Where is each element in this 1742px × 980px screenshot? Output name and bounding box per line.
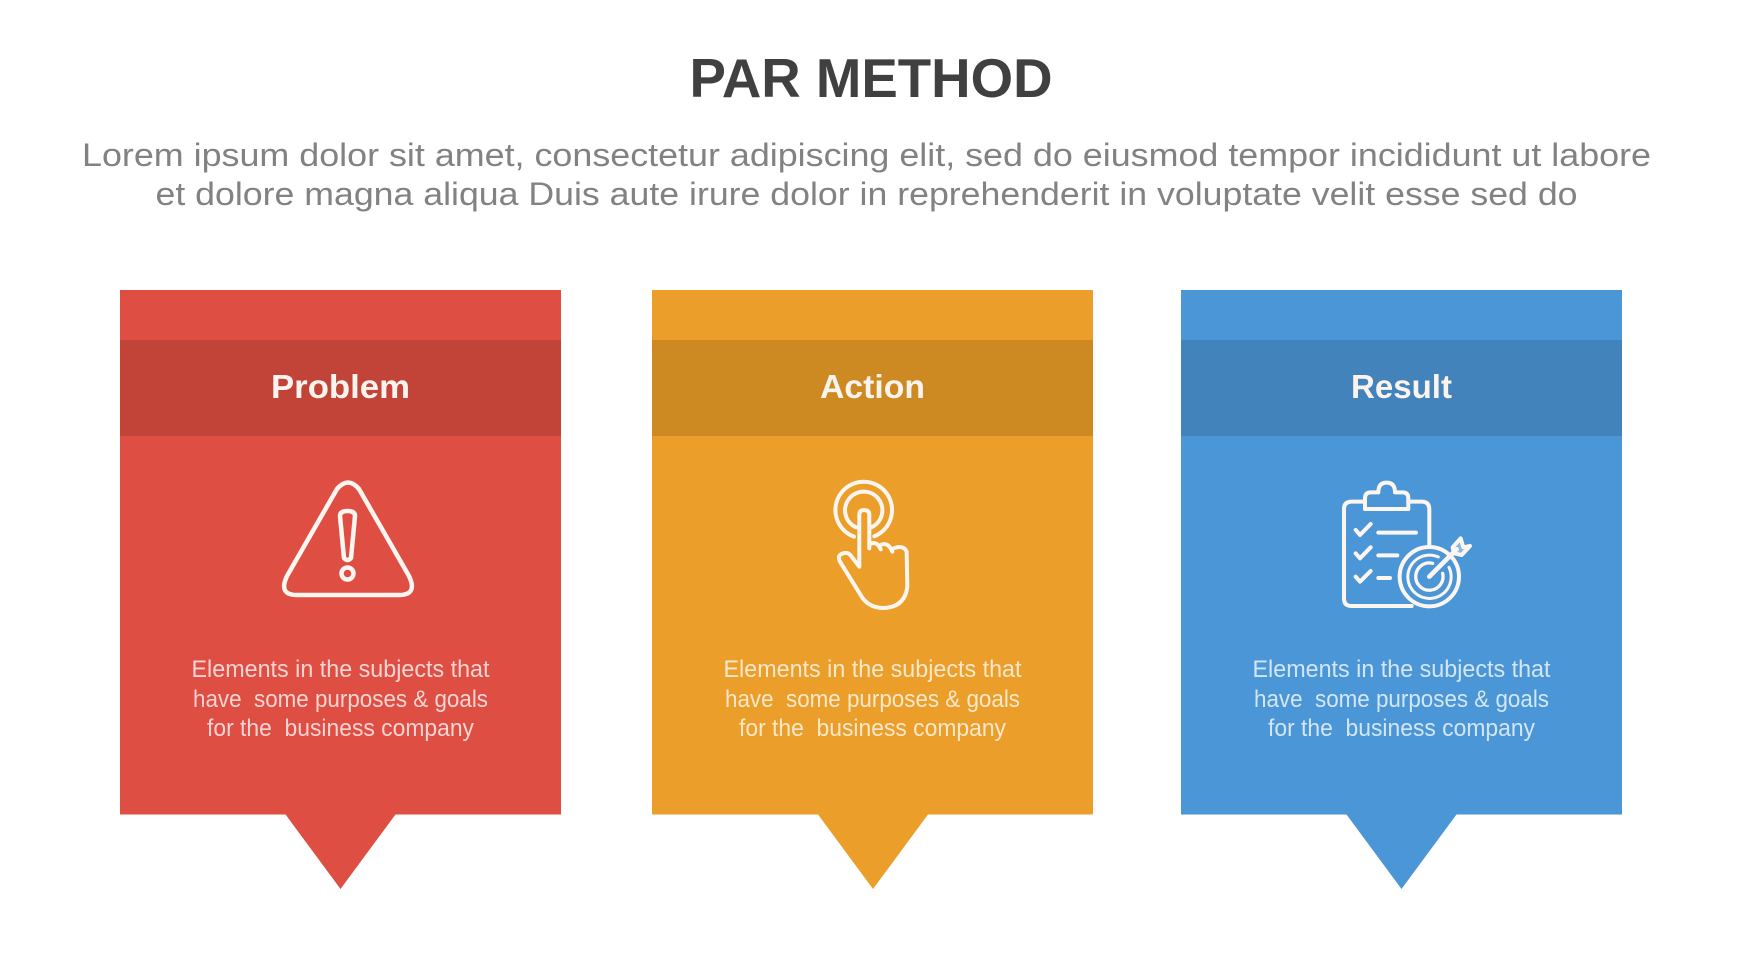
subtitle text block: Lorem ipsum dolor sit amet, consectetur adipiscing elit, sed do eiusmod tempor incididunt ut labore xyxy=(82,137,1651,173)
action header band xyxy=(652,340,1093,436)
title: PAR METHOD xyxy=(690,47,1052,109)
result description xyxy=(1252,656,1551,742)
result header band xyxy=(1181,340,1622,436)
result description: Elements in the subjects that xyxy=(1252,656,1551,683)
problem description xyxy=(192,656,490,742)
action heading: Action xyxy=(820,368,925,405)
action description xyxy=(724,656,1022,742)
subtitle text block xyxy=(82,137,1651,212)
result description: have some purposes & goals xyxy=(1254,686,1549,713)
problem description: for the business company xyxy=(207,715,474,742)
problem header band xyxy=(120,340,561,436)
problem description: Elements in the subjects that xyxy=(192,656,490,683)
result callout box with pointer xyxy=(1181,290,1622,889)
icon: warning triangle xyxy=(284,482,412,595)
panel: result xyxy=(1181,290,1622,889)
panel: action xyxy=(652,290,1093,889)
subtitle text block: et dolore magna aliqua Duis aute irure dolor in reprehenderit in voluptate velit esse sed do xyxy=(156,176,1578,212)
result heading: Result xyxy=(1351,368,1452,405)
action description: Elements in the subjects that xyxy=(724,656,1022,683)
action description: for the business company xyxy=(739,715,1006,742)
icon: clipboard checklist with target xyxy=(1344,483,1470,606)
action description: have some purposes & goals xyxy=(725,686,1020,713)
action callout box with pointer xyxy=(652,290,1093,889)
problem heading: Problem xyxy=(271,368,410,405)
icon: pointing hand tapping xyxy=(835,482,907,608)
problem callout box with pointer xyxy=(120,290,561,889)
panel: problem xyxy=(120,290,561,889)
result description: for the business company xyxy=(1268,715,1535,742)
problem description: have some purposes & goals xyxy=(193,686,488,713)
